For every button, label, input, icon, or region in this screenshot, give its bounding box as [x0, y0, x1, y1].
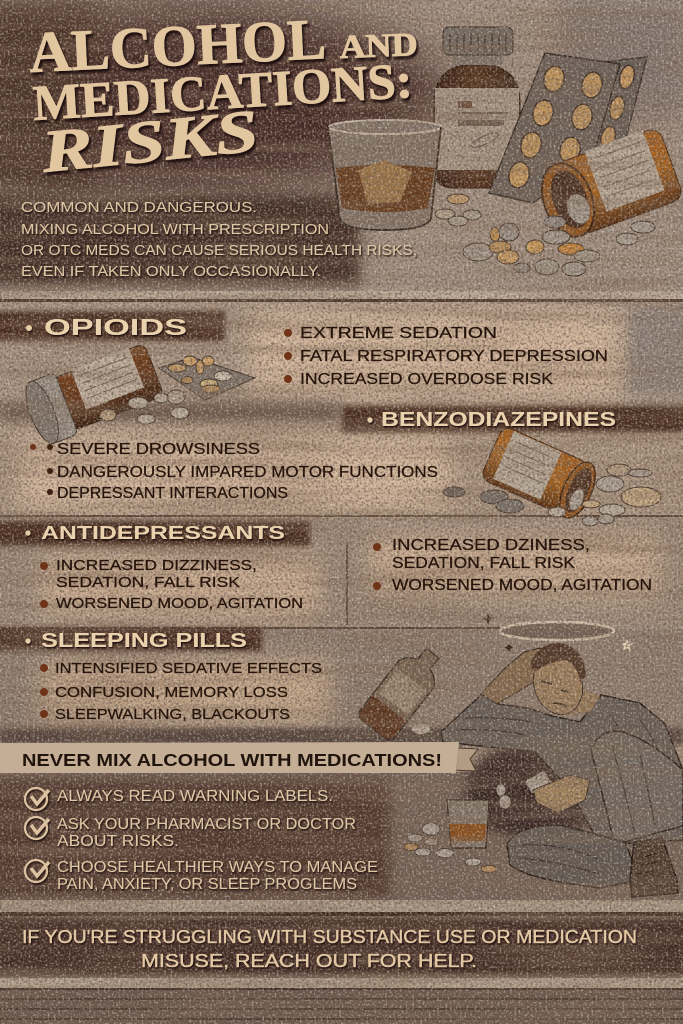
sleeping pill risks list: CONFUSION, MEMORY LOSS	[55, 684, 288, 701]
heading: sleeping pills: SLEEPING PILLS	[41, 630, 247, 652]
man: lower leg	[507, 825, 640, 888]
benzodiazepine risks list: SEVERE DROWSINESS	[57, 441, 260, 458]
opioid risks list: FATAL RESPIRATORY DEPRESSION	[300, 348, 608, 365]
antidepressant risks right column: INCREASED DZINESS,	[392, 537, 590, 554]
opioid risks list: EXTREME SEDATION	[300, 325, 497, 342]
panel: benzodiazepines	[30, 409, 616, 502]
opioid risks list	[284, 325, 608, 388]
empty bottle	[356, 640, 450, 742]
title: RISKS	[37, 97, 261, 185]
man: head and hair	[560, 690, 600, 716]
heading: antidepressants: ANTIDEPRESSANTS	[41, 522, 285, 543]
benzodiazepine risks list	[30, 441, 438, 502]
small whiskey glass	[447, 800, 489, 848]
intro text: OR OTC MEDS CAN CAUSE SERIOUS HEALTH RISKS,	[21, 243, 417, 259]
benzodiazepine risks list: DANGEROUSLY IMPARED MOTOR FUNCTIONS	[57, 464, 438, 481]
man: raised leg	[591, 731, 683, 845]
icon: dizziness halo and stars: ✦	[503, 639, 515, 657]
antidepressant risks left column: INCREASED DIZZINESS,	[56, 557, 257, 574]
peach panels behind bullets	[0, 302, 683, 402]
section dividers	[0, 291, 683, 1020]
intro text: COMMON AND DANGEROUS.	[21, 200, 257, 216]
icon: check 1	[25, 788, 49, 810]
hero illustration: blister pack	[489, 53, 647, 203]
illustration: dizzy man with bottle and glass	[356, 610, 683, 897]
icon: dizziness halo and stars: ★	[619, 635, 635, 656]
title: MEDICATIONS:	[31, 52, 414, 131]
intro text: MIXING ALCOHOL WITH PRESCRIPTION	[21, 222, 329, 238]
sleeping pill risks list	[40, 660, 322, 723]
antidepressant risks right column: SEDATION, FALL RISK	[392, 555, 576, 572]
man: hand and pill bottle	[525, 770, 551, 794]
banner: never mix	[0, 742, 478, 773]
hero illustration: spilled pills	[435, 194, 655, 276]
antidepressant risks left column: WORSENED MOOD, AGITATION	[56, 595, 303, 612]
advice text: PAIN, ANXIETY, OR SLEEP PROGLEMS	[57, 876, 357, 893]
icon: dizziness halo and stars	[481, 610, 635, 657]
footer call to action: MISUSE, REACH OUT FOR HELP.	[141, 951, 477, 971]
intro text: EVEN IF TAKEN ONLY OCCASIONALLY.	[21, 264, 321, 280]
icon: dizziness halo and stars: ✦	[481, 610, 495, 630]
banner: never mix: NEVER MIX ALCOHOL WITH MEDICATIONS!	[22, 750, 442, 770]
antidepressant risks right column: WORSENED MOOD, AGITATION	[392, 577, 652, 594]
shadow behind man	[465, 740, 605, 840]
advice text: ABOUT RISKS.	[57, 833, 179, 850]
advice checklist	[25, 788, 378, 893]
intro text	[21, 200, 417, 280]
advice text	[57, 788, 378, 893]
antidepressant risks right column	[373, 537, 652, 594]
panel: antidepressants	[25, 522, 652, 612]
icon: check 3	[25, 860, 49, 882]
antidepressant risks left column: SEDATION, FALL RISK	[56, 574, 240, 591]
title: ALCOHOL	[28, 6, 327, 85]
opioid risks list: INCREASED OVERDOSE RISK	[300, 371, 553, 388]
floor pills	[404, 784, 511, 872]
header band shadows	[0, 311, 683, 974]
heading: opioids	[26, 314, 187, 340]
footer call to action: IF YOU'RE STRUGGLING WITH SUBSTANCE USE OR MEDICATION	[22, 927, 637, 947]
title	[28, 6, 418, 185]
advice text: ASK YOUR PHARMACIST OR DOCTOR	[57, 816, 356, 833]
panel: opioids	[26, 314, 608, 388]
heading: benzodiazepines: BENZODIAZEPINES	[381, 409, 616, 431]
hero illustration: medicine bottle	[434, 27, 520, 188]
advice text: CHOOSE HEALTHIER WAYS TO MANAGE	[57, 859, 378, 876]
icon: check 2	[25, 817, 49, 839]
heading: opioids: OPIOIDS	[44, 314, 187, 340]
panel: sleeping pills	[25, 630, 322, 723]
opioids illustration: tipped bottle and pills	[19, 339, 255, 448]
benzodiazepine risks list: DEPRESSANT INTERACTIONS	[57, 485, 288, 502]
footer call to action	[22, 927, 637, 971]
sleeping pill risks list: INTENSIFIED SEDATIVE EFFECTS	[55, 660, 322, 677]
man: torso and sleeve	[441, 694, 683, 845]
advice text: ALWAYS READ WARNING LABELS.	[57, 788, 333, 805]
benzodiazepines illustration: tipped bottle and pills	[443, 424, 661, 526]
man: forearm	[481, 648, 548, 704]
sleeping pill risks list: SLEEPWALKING, BLACKOUTS	[55, 706, 290, 723]
hero illustration: tipped orange pill bottle	[532, 125, 683, 244]
man: shoe	[630, 838, 678, 897]
antidepressant risks left column	[40, 557, 303, 612]
hero illustration: whiskey glass	[328, 120, 441, 230]
title: AND	[339, 27, 418, 66]
